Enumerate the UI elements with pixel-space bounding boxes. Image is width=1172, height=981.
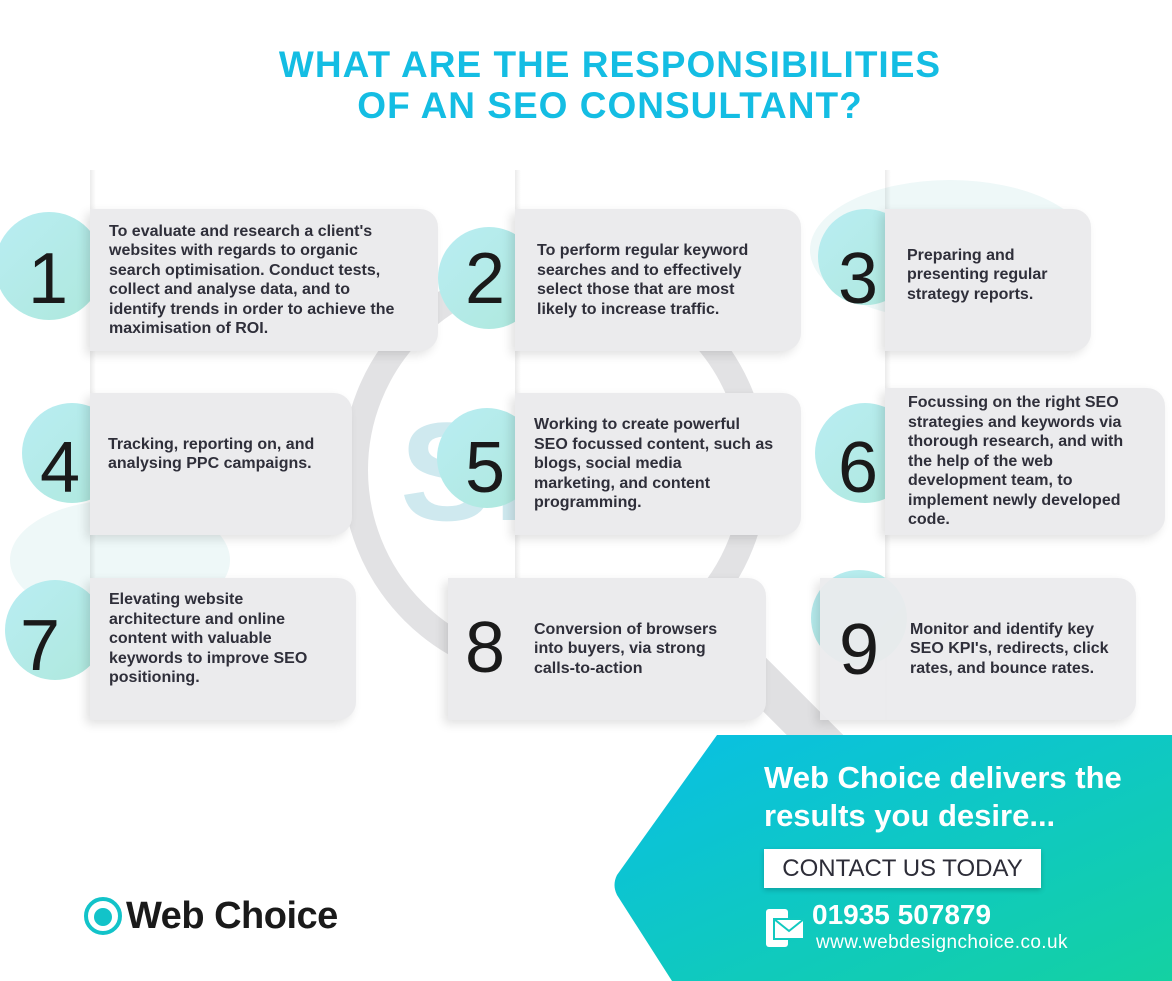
contact button: CONTACT US TODAY	[782, 855, 1023, 882]
item 7: architecture and online	[109, 611, 285, 628]
title: OF AN SEO CONSULTANT?	[357, 85, 863, 126]
item 5	[437, 393, 801, 542]
item 2: 2	[465, 239, 505, 319]
item 2: To perform regular keyword	[537, 242, 748, 259]
item 6	[815, 388, 1165, 542]
item 8: calls-to-action	[534, 660, 642, 677]
item 6: implement newly developed	[908, 492, 1120, 509]
item 2: likely to increase traffic.	[537, 300, 719, 318]
item 6: code.	[908, 511, 950, 528]
CTA heading	[764, 760, 1122, 833]
item 4: 4	[40, 428, 80, 508]
item 4: analysing PPC campaigns.	[108, 455, 312, 472]
item 1: identify trends in order to achieve the	[109, 300, 394, 318]
contact button	[764, 849, 1041, 888]
item 7: Elevating website	[109, 591, 243, 608]
item 2: select those that are most	[537, 281, 734, 298]
item 3: presenting regular	[907, 266, 1047, 283]
item 6: 6	[838, 428, 878, 508]
item 1: collect and analyse data, and to	[109, 281, 350, 298]
phone: 01935 507879	[812, 899, 991, 930]
item 6: strategies and keywords via	[908, 414, 1121, 431]
website: www.webdesignchoice.co.uk	[816, 932, 1068, 953]
item 4: Tracking, reporting on, and	[108, 436, 314, 452]
item 3: 3	[838, 239, 878, 319]
item 8: into buyers, via strong	[534, 640, 706, 657]
item 7: positioning.	[109, 669, 200, 686]
item 9: Monitor and identify key	[910, 621, 1094, 638]
item 5: SEO focussed content, such as	[534, 436, 773, 453]
item 5: 5	[465, 428, 505, 508]
item 8: Conversion of browsers	[534, 621, 717, 638]
item 1: search optimisation. Conduct tests,	[109, 262, 380, 278]
item 2	[438, 209, 801, 358]
title	[278, 44, 941, 126]
item 5: blogs, social media	[534, 455, 682, 472]
item 9: 9	[839, 610, 879, 690]
item 1	[0, 209, 438, 358]
item 7: 7	[20, 606, 60, 686]
item 3	[818, 209, 1091, 358]
item 8	[441, 578, 766, 727]
item 7	[5, 578, 356, 727]
item 6: development team, to	[908, 472, 1072, 489]
item 1: maximisation of ROI.	[109, 320, 268, 337]
CTA panel	[614, 735, 1172, 981]
item 4	[22, 393, 352, 542]
item 1: 1	[28, 239, 68, 319]
item 7: keywords to improve SEO	[109, 650, 307, 667]
item 7: content with valuable	[109, 630, 272, 647]
item 5: marketing, and content	[534, 475, 710, 492]
item 9	[811, 570, 1136, 727]
item 6: thorough research, and with	[908, 433, 1123, 450]
item 1: To evaluate and research a client's	[109, 222, 372, 240]
CTA heading: results you desire...	[764, 798, 1055, 833]
item 9: SEO KPI's, redirects, click	[910, 640, 1109, 657]
item 6: the help of the web	[908, 453, 1053, 470]
item 3: strategy reports.	[907, 286, 1033, 303]
logo: Web Choice	[126, 895, 338, 937]
item 1: websites with regards to organic	[109, 242, 358, 259]
item 2: searches and to effectively	[537, 262, 742, 278]
background: magnifier and map: SEO	[400, 393, 696, 550]
CTA heading: Web Choice delivers the	[764, 760, 1122, 795]
item 5: Working to create powerful	[534, 416, 740, 433]
item 5: programming.	[534, 494, 642, 511]
icon: phone mail	[766, 909, 803, 947]
item 8: 8	[465, 608, 505, 688]
item 3: Preparing and	[907, 247, 1015, 264]
item 9: rates, and bounce rates.	[910, 660, 1094, 677]
title: WHAT ARE THE RESPONSIBILITIES	[279, 44, 941, 85]
item 6: Focussing on the right SEO	[908, 394, 1119, 411]
